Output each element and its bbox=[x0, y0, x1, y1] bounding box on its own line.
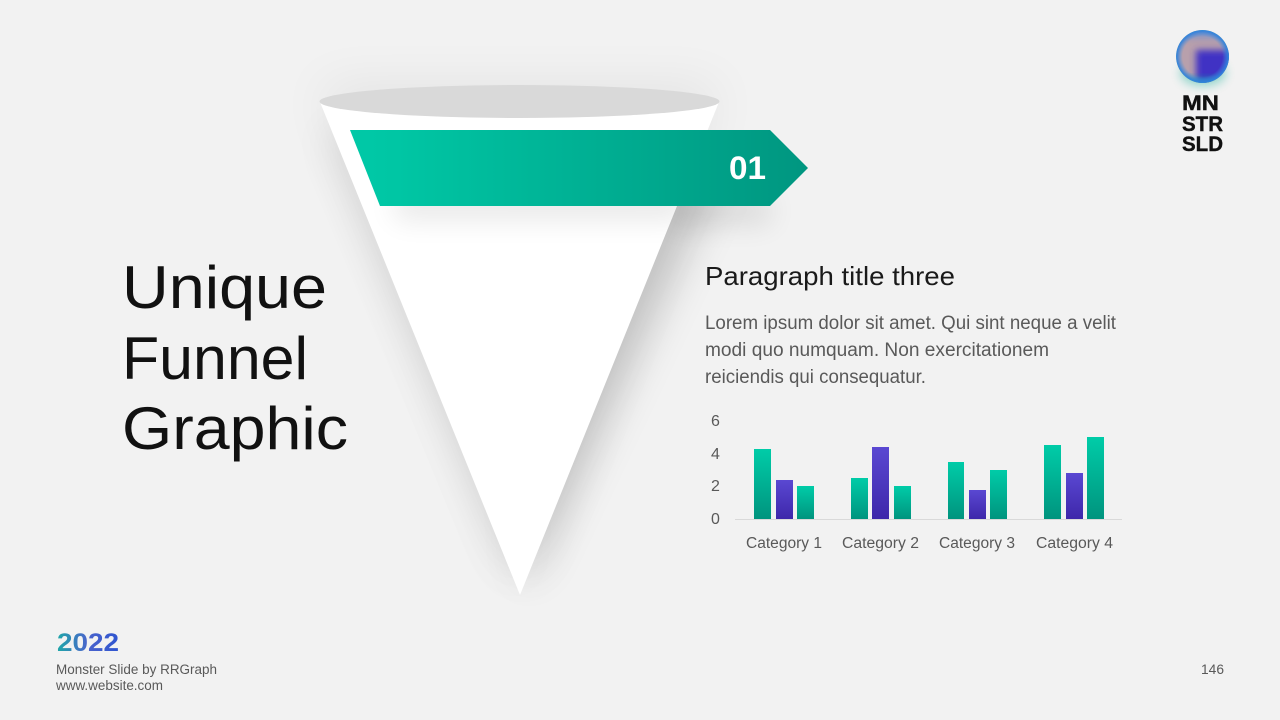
paragraph text bbox=[705, 313, 1117, 388]
slide title: Unique bbox=[122, 254, 327, 321]
category labels: Category 4 bbox=[1036, 535, 1113, 552]
ribbon shadow bbox=[396, 206, 677, 224]
y axis labels: 4 bbox=[711, 446, 720, 463]
axis line bbox=[735, 519, 1122, 520]
logo text: STR bbox=[1182, 113, 1223, 136]
page number: 146 bbox=[1201, 661, 1224, 677]
slide title: Graphic bbox=[122, 395, 348, 462]
ribbon banner bbox=[350, 130, 808, 206]
slide title: Funnel bbox=[122, 325, 308, 392]
logo bbox=[1174, 30, 1232, 152]
bars: category 3 bbox=[948, 462, 1007, 519]
logo text: MN bbox=[1182, 92, 1219, 115]
ribbon number: 01 bbox=[729, 150, 766, 186]
paragraph text: modi quo numquam. Non exercitationem bbox=[705, 340, 1049, 361]
y axis labels: 6 bbox=[711, 413, 720, 430]
category labels: Category 3 bbox=[939, 535, 1015, 552]
bars: category 1 bbox=[754, 449, 814, 519]
paragraph text: Lorem ipsum dolor sit amet. Qui sint neque a velit bbox=[705, 313, 1117, 334]
y axis labels: 2 bbox=[711, 478, 720, 495]
footer credit bbox=[55, 662, 217, 693]
bars: category 2 bbox=[851, 447, 911, 519]
logo glow bbox=[1180, 60, 1226, 86]
category labels: Category 1 bbox=[746, 535, 822, 552]
footer credit: Monster Slide by RRGraph bbox=[56, 662, 217, 677]
funnel opening bbox=[320, 85, 720, 118]
footer credit: www.website.com bbox=[55, 678, 163, 693]
logo sphere bbox=[1176, 30, 1229, 83]
y axis labels bbox=[711, 413, 720, 528]
bar chart bbox=[711, 413, 1122, 552]
paragraph text: reiciendis qui consequatur. bbox=[705, 367, 926, 388]
year: 2022 bbox=[57, 629, 119, 657]
bars: category 4 bbox=[1044, 437, 1104, 519]
paragraph title: Paragraph title three bbox=[705, 261, 955, 291]
category labels bbox=[746, 535, 1113, 552]
category labels: Category 2 bbox=[842, 535, 919, 552]
funnel body bbox=[320, 102, 719, 595]
slide title bbox=[122, 254, 348, 462]
y axis labels: 0 bbox=[711, 511, 720, 528]
logo text bbox=[1182, 92, 1223, 156]
funnel graphic bbox=[318, 84, 770, 595]
logo text: SLD bbox=[1182, 133, 1223, 156]
funnel shadow bbox=[318, 84, 770, 590]
